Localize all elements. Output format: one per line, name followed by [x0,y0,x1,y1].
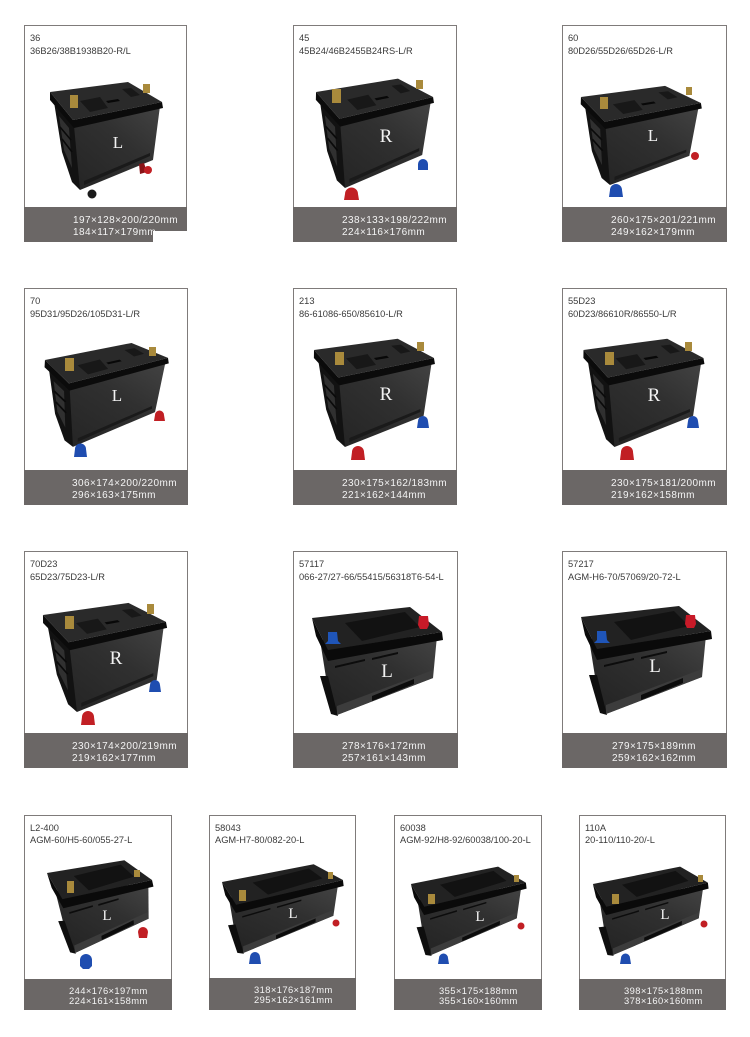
dimension bar: 295×162×161mm [254,994,333,1005]
panel: 45 [293,25,457,242]
label: AGM-92/H8-92/60038/100-20-L [400,835,531,845]
dimension bar: 306×174×200/220mm [72,478,177,489]
battery 9 [581,606,712,715]
dimension bar [293,733,458,768]
panel: 57217 [562,551,727,768]
battery 10 [46,859,160,969]
dimension bar: 355×160×160mm [439,995,518,1006]
panel: 60 [562,25,727,242]
label [568,296,677,318]
label [30,822,132,845]
label: 213 [299,296,315,306]
dimension bar: 259×162×162mm [612,752,696,764]
battery 1 [50,82,163,198]
battery 13 [591,864,709,964]
dimension bar: 197×128×200/220mm [73,215,178,226]
battery 4 [40,339,170,457]
label: 60 [568,32,578,42]
label: 60D23/86610R/86550-L/R [568,308,677,318]
label: 57117 [299,558,324,568]
dimension bar [562,470,727,505]
battery 11 [220,861,344,964]
battery 2 [314,77,435,200]
panel: 60038 [394,815,542,1010]
label: 80D26/55D26/65D26-L/R [568,46,673,56]
panel: 213 [293,288,457,505]
dimension bar: 221×162×144mm [342,490,426,500]
polarity letters: R [380,126,393,147]
panel: 36 [24,25,187,242]
polarity letters [102,126,670,925]
dimension bar: 224×161×158mm [69,995,148,1006]
dimension bar: 249×162×179mm [611,226,695,238]
dimension bar: 219×162×158mm [611,490,695,500]
battery 7 [43,602,168,725]
polarity letters: R [648,385,661,406]
label: 58043 [215,822,241,832]
label: L2-400 [30,822,59,832]
dimension bar [24,979,172,1010]
polarity letters: L [112,386,122,405]
dimension bar [579,979,726,1010]
label [299,32,413,56]
label: 45B24/46B2455B24RS-L/R [299,46,413,56]
dimension bar: 230×175×181/200mm [611,478,716,489]
dimension bar: 318×176×187mm [254,984,333,994]
dimension bar [562,207,727,242]
dimension bar: 398×175×188mm [624,984,703,996]
label: 86-61086-650/85610-L/R [299,308,403,318]
panel: 57117 [293,551,458,768]
panel: 110A [579,815,726,1010]
dimension bar [24,733,188,768]
panel: L2-400 [24,815,172,1010]
battery 3 [578,85,703,197]
label [585,822,655,845]
dimension bar: 224×116×176mm [342,226,425,238]
panel: 55D23 [562,288,727,505]
dimension bar [24,470,188,505]
label [400,822,531,845]
label: AGM-60/H5-60/055-27-L [30,835,132,845]
polarity letters: L [113,133,123,152]
label: 57217 [568,558,594,568]
dimension bar [562,733,727,768]
label: 36B26/38B1938B20-R/L [30,46,131,56]
dimension bar [293,207,457,242]
dimension bar: 279×175×189mm [612,741,696,752]
polarity letters: L [660,907,670,923]
dimension bar [394,979,542,1010]
polarity letters: L [381,661,393,682]
label: 70 [30,296,40,306]
dimension bar: 296×163×175mm [72,490,156,500]
polarity letters: L [288,906,298,922]
label: 20-110/110-20/-L [585,835,655,845]
label: 066-27/27-66/55415/56318T6-54-L [299,572,444,582]
label [30,32,131,56]
dimension bar: 230×174×200/219mm [72,741,177,752]
dimension bar: 184×117×179mm [73,226,156,238]
polarity letters: L [102,908,112,924]
label: AGM-H7-80/082-20-L [215,835,304,845]
dimension bar: 257×161×143mm [342,752,426,764]
label: 65D23/75D23-L/R [30,572,105,582]
polarity letters: L [648,126,658,145]
dimension bar: 238×133×198/222mm [342,215,447,226]
polarity letters: R [110,648,123,669]
battery 12 [409,864,527,964]
label: 70D23 [30,558,57,568]
dimension bar: 378×160×160mm [624,995,703,1006]
dimension bar: 244×176×197mm [69,984,148,996]
polarity letters: R [380,384,393,405]
dimension bar: 230×175×162/183mm [342,478,447,489]
label: AGM-H6-70/57069/20-72-L [568,572,681,582]
label: 36 [30,32,40,42]
label [568,558,681,582]
panel: 70 [24,288,188,505]
label: 45 [299,32,309,42]
dimension bar [293,470,457,505]
label: 110A [585,822,606,832]
polarity letters: L [649,656,661,677]
dimension bar: 355×175×188mm [439,984,518,996]
label: 55D23 [568,296,595,306]
panel: 70D23 [24,551,188,768]
label [215,822,304,845]
label [299,558,444,582]
polarity letters: L [475,909,485,925]
label [299,296,403,318]
label [30,558,105,582]
battery 5 [313,338,435,460]
label [568,32,673,56]
dimension bar: 260×175×201/221mm [611,215,716,226]
label [30,296,140,318]
panel: 58043 [209,815,356,1010]
dimension bar [24,207,187,242]
dimension bar: 219×162×177mm [72,752,156,764]
label: 60038 [400,822,426,832]
label: 95D31/95D26/105D31-L/R [30,308,140,318]
battery 6 [582,338,705,460]
battery 8 [312,607,443,716]
dimension bar: 278×176×172mm [342,741,426,752]
dimension bar [209,978,356,1010]
